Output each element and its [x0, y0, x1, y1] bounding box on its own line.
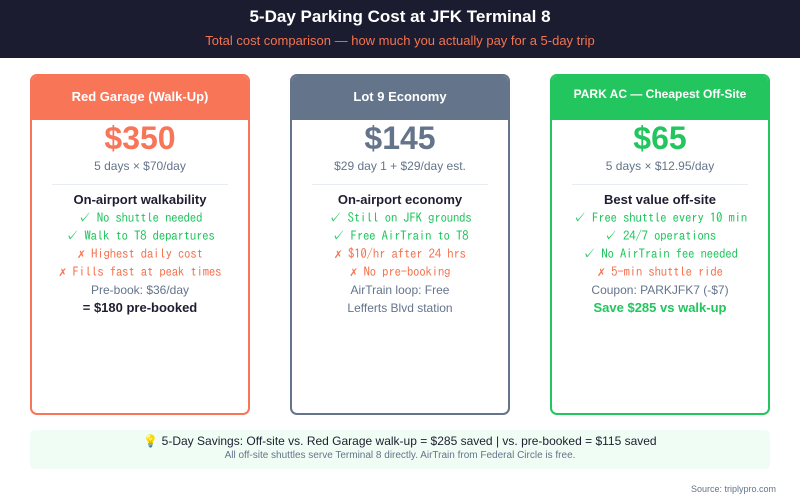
- panel: lot 9: [290, 74, 510, 415]
- features: ✗ Fills fast at peak times: [59, 265, 221, 278]
- features: ✗ $10/hr after 24 hrs: [334, 247, 466, 260]
- panel: park ac: [550, 74, 770, 415]
- features: ✗ No pre-booking: [350, 265, 450, 278]
- features: ✓ No shuttle needed: [78, 211, 202, 224]
- panel: red garage: 5 days × $70/day: [94, 159, 186, 173]
- savings callout: All off-site shuttles serve Terminal 8 directly. AirTrain from Federal Circle is free.: [225, 450, 575, 461]
- features: On-airport walkability: [74, 192, 206, 207]
- card header: [550, 74, 770, 120]
- card header: [30, 74, 250, 120]
- features: ✗ Highest daily cost: [77, 247, 203, 260]
- features: Coupon: PARKJFK7 (-$7): [591, 283, 729, 297]
- features: Lefferts Blvd station: [347, 301, 453, 315]
- card header: PARK AC — Cheapest Off-Site: [574, 87, 746, 101]
- features: ✓ Free shuttle every 10 min: [573, 211, 747, 224]
- panel: park ac: 5 days × $12.95/day: [606, 159, 714, 173]
- subtitle: Total cost comparison — how much you actually pay for a 5-day trip: [205, 33, 595, 48]
- features: ✓ 24/7 operations: [604, 229, 716, 242]
- features: Save $285 vs walk-up: [594, 300, 726, 315]
- savings callout: [30, 430, 770, 469]
- title: 5-Day Parking Cost at JFK Terminal 8: [249, 7, 551, 26]
- features: ✓ No AirTrain fee needed: [582, 247, 738, 260]
- card header: [290, 74, 510, 120]
- source: Source: triplypro.com: [691, 484, 776, 494]
- features: ✓ Still on JFK grounds: [329, 211, 471, 224]
- card header: Lot 9 Economy: [353, 89, 447, 104]
- price: $65: [633, 120, 687, 156]
- features: ✓ Free AirTrain to T8: [332, 229, 468, 242]
- features: Best value off-site: [604, 192, 716, 207]
- panel: lot 9: $29 day 1 + $29/day est.: [334, 159, 466, 173]
- features: ✓ Walk to T8 departures: [65, 229, 215, 242]
- price: $145: [364, 120, 436, 156]
- savings callout: 💡 5-Day Savings: Off-site vs. Red Garage walk-up = $285 saved | vs. pre-booked = $115 saved: [143, 434, 657, 448]
- price: $350: [104, 120, 176, 156]
- features: Pre-book: $36/day: [91, 283, 189, 297]
- header: [0, 0, 800, 58]
- features: [573, 192, 747, 315]
- features: [59, 192, 221, 315]
- features: AirTrain loop: Free: [351, 283, 449, 297]
- features: [329, 192, 471, 315]
- features: ✗ 5-min shuttle ride: [597, 265, 723, 278]
- features: = $180 pre-booked: [83, 300, 197, 315]
- card header: Red Garage (Walk-Up): [72, 89, 208, 104]
- panel: red garage: [30, 74, 250, 415]
- features: On-airport economy: [338, 192, 462, 207]
